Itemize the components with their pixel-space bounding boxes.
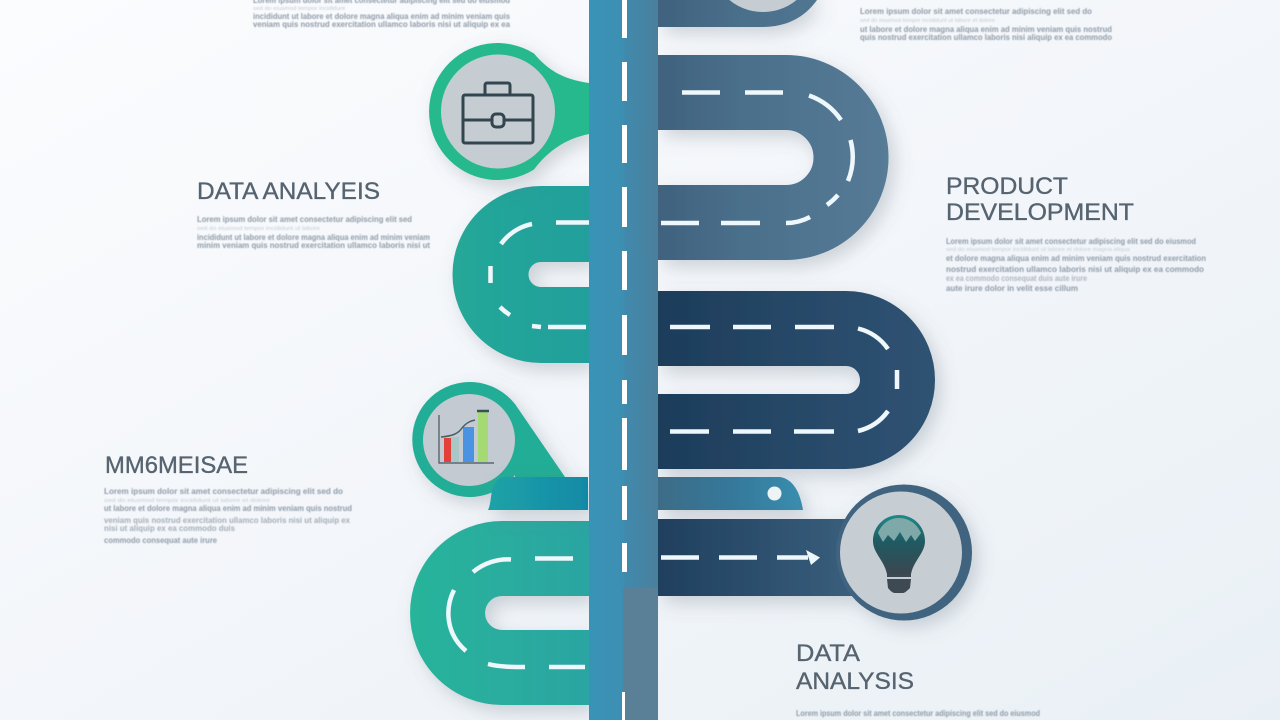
- text block: mm6meisae: ut labore et dolore magna aliqua enim ad minim veniam quis nostrud: [104, 503, 352, 513]
- text block: product development: Lorem ipsum dolor sit amet consectetur adipiscing elit sed do eiusmod: [946, 236, 1196, 246]
- text block: top right: sed do eiusmod tempor incididunt ut labore et dolore: [860, 18, 995, 24]
- text block: product development: ex ea commodo consequat duis aute irure: [946, 273, 1087, 283]
- road: lower left loop: [448, 558, 589, 668]
- road: top right segment with cut-off pin: [658, 0, 817, 27]
- heading: data analysis: [796, 640, 914, 695]
- road: middle right loop: [658, 327, 898, 432]
- pin: chart: [412, 382, 565, 497]
- text block: top right: [860, 6, 1112, 42]
- text block: mm6meisae: veniam quis nostrud exercitation ullamco laboris nisi ut aliquip ex: [104, 515, 350, 525]
- text block: mm6meisae: [104, 486, 352, 545]
- pin: briefcase: [429, 43, 589, 180]
- text block: top right: quis nostrud exercitation ullamco laboris nisi aliquip ex ea commodo: [860, 32, 1112, 42]
- icon: bar chart: [439, 411, 494, 463]
- heading: product development: DEVELOPMENT: [946, 199, 1134, 226]
- road: arrow road to bulb pin: [658, 484, 972, 620]
- road: central vertical road: [589, 0, 658, 720]
- text block: top right: ut labore et dolore magna aliqua enim ad minim veniam quis nostrud: [860, 24, 1112, 34]
- text block: mm6meisae: commodo consequat aute irure: [104, 535, 217, 545]
- heading: data analyeis: DATA ANALYEIS: [197, 178, 380, 205]
- text block: data analyeis: incididunt ut labore et dolore magna aliqua enim ad minim veniam: [197, 232, 430, 242]
- text block: top left: [253, 0, 510, 29]
- text block: product development: [946, 236, 1206, 293]
- icon: light bulb: [873, 515, 925, 593]
- text block: data analyeis: minim veniam quis nostrud exercitation ullamco laboris nisi ut: [197, 240, 430, 250]
- text block: product development: sed do eiusmod tempor incididunt ut labore et dolore magna aliqua: [946, 247, 1131, 253]
- road: upper left loop: [490, 222, 589, 327]
- text block: top left: sed do eiusmod tempor incididunt: [253, 6, 346, 12]
- heading: product development: PRODUCT: [946, 173, 1068, 200]
- text block: top right: Lorem ipsum dolor sit amet consectetur adipiscing elit sed do: [860, 6, 1092, 16]
- text block: mm6meisae: nisi ut aliquip ex ea commodo duis: [104, 523, 235, 533]
- text block: top left: incididunt ut labore et dolore magna aliqua enim ad minim veniam quis: [253, 11, 510, 21]
- text block: product development: et dolore magna aliqua enim ad minim veniam quis nostrud exercitation: [946, 253, 1206, 263]
- text block: product development: nostrud exercitation ullamco laboris nisi ut aliquip ex ea commodo: [946, 264, 1204, 274]
- heading: data analysis: ANALYSIS: [796, 668, 914, 695]
- heading: data analysis: DATA: [796, 640, 860, 667]
- heading: product development: [946, 173, 1134, 226]
- road: lower band right: [658, 477, 803, 510]
- text block: product development: aute irure dolor in velit esse cillum: [946, 283, 1078, 293]
- text block: data analyeis: [197, 214, 430, 250]
- text block: data analysis: Lorem ipsum dolor sit amet consectetur adipiscing elit sed do eiusmod: [796, 708, 1040, 718]
- road: upper right loop: [658, 92, 853, 223]
- road: lower band left: [488, 477, 588, 510]
- arrow: dashes with arrowhead: [661, 550, 820, 565]
- text block: top left: veniam quis nostrud exercitation ullamco laboris nisi ut aliquip ex ea: [253, 19, 510, 29]
- heading: mm6meisae: MM6MEISAE: [105, 452, 248, 479]
- text block: mm6meisae: Lorem ipsum dolor sit amet consectetur adipiscing elit sed do: [104, 486, 343, 496]
- text block: mm6meisae: sed do eiusmod tempor incididunt ut labore et dolore: [104, 498, 270, 504]
- text block: data analyeis: Lorem ipsum dolor sit amet consectetur adipiscing elit sed: [197, 214, 412, 224]
- icon: briefcase: [463, 83, 533, 143]
- text block: data analyeis: sed do eiusmod tempor incididunt ut labore: [197, 226, 320, 232]
